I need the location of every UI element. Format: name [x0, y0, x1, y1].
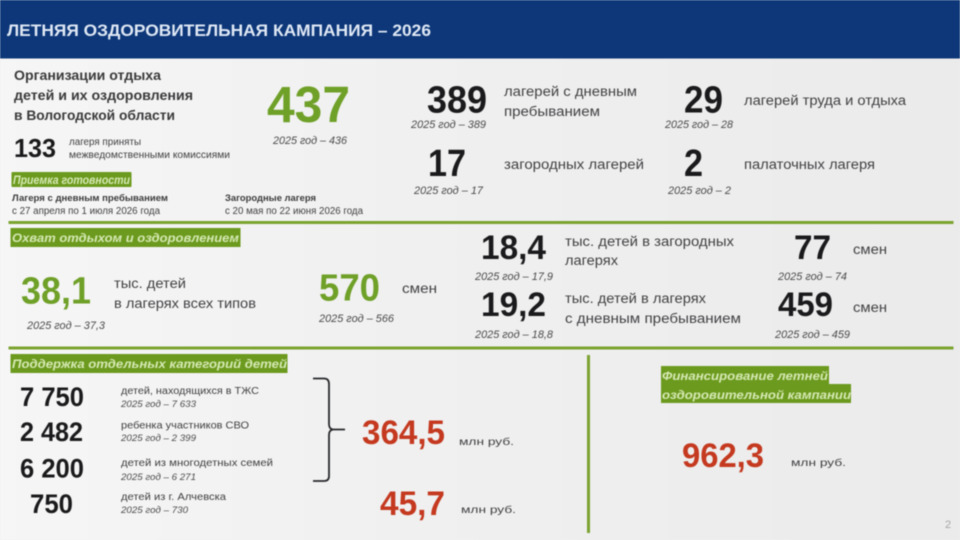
- stat: 19,2: 19,2: [481, 286, 546, 324]
- stat: 389: лагерей с дневным: [504, 84, 637, 99]
- stat: 2: палаточных лагеря: [744, 157, 875, 172]
- stat: 38,1: 38,1: [21, 270, 91, 312]
- stat: 389: 389: [427, 80, 487, 122]
- stat: 18,4: лагерях: [565, 253, 618, 268]
- stat: 2 482: 2025 год – 2 399: [120, 433, 197, 444]
- amount: 962,3: [682, 437, 846, 475]
- stat: 17: 17: [428, 143, 466, 185]
- dates: country camps: с 20 мая по 22 июня 2026 года: [225, 206, 363, 217]
- stat: 18,4: 2025 год – 17,9: [474, 271, 553, 283]
- stat: 17: [413, 143, 644, 197]
- stat: 389: [410, 80, 637, 131]
- stat: 570: 570: [319, 268, 380, 310]
- amount: 45,7: млн руб.: [461, 504, 516, 516]
- stat: 750: [30, 489, 226, 519]
- stat: 459: смен: [853, 300, 887, 315]
- stat: 6 200: [20, 454, 273, 484]
- stat: 7 750: 2025 год – 7 633: [120, 399, 197, 410]
- panel: organisations: [12, 67, 907, 217]
- stat: 6 200: 6 200: [20, 454, 84, 484]
- stat: 750: детей из г. Алчевска: [121, 492, 226, 503]
- stat: 18,4: 18,4: [481, 229, 546, 267]
- amount: 364,5: 364,5: [362, 414, 445, 452]
- label: financing: [661, 366, 852, 403]
- stat: 29: [664, 80, 907, 131]
- stat: 17: загородных лагерей: [504, 157, 644, 172]
- amount: 364,5: [362, 414, 514, 452]
- stat: 2: 2025 год – 2: [667, 185, 731, 197]
- amount: 962,3: млн руб.: [791, 457, 846, 469]
- stat: 133: [14, 133, 230, 163]
- stat: 6 200: 2025 год – 6 271: [120, 472, 196, 483]
- stat: 750: 2025 год – 730: [120, 505, 189, 516]
- stat: 38,1: в лагерях всех типов: [114, 296, 256, 311]
- stat: 389: пребыванием: [504, 104, 600, 119]
- panel: coverage: [10, 228, 887, 341]
- stat: 38,1: [21, 270, 256, 332]
- stat: 77: [777, 229, 887, 283]
- stat: 77: 2025 год – 74: [777, 271, 847, 283]
- stat: 459: 2025 год – 459: [774, 329, 850, 341]
- stat: 77: смен: [853, 242, 887, 257]
- label: coverage: [10, 228, 240, 247]
- stat: 19,2: [474, 286, 741, 341]
- dates: day camps: [12, 193, 168, 217]
- heading: organisations: в Вологодской области: [14, 107, 175, 123]
- stat: 133: лагеря приняты: [69, 137, 141, 148]
- stat: 7 750: 7 750: [20, 382, 84, 412]
- stat: 38,1: 2025 год – 37,3: [26, 320, 106, 332]
- stat: 437: 2025 год – 436: [272, 135, 348, 147]
- stat: 2 482: [20, 417, 249, 447]
- bracket: [313, 378, 345, 481]
- label: readiness: Приемка готовности: [13, 173, 131, 187]
- stat: 2: 2: [684, 143, 703, 185]
- stat: 437: 437: [267, 76, 350, 133]
- stat: 459: 459: [778, 286, 833, 324]
- title: ЛЕТНЯЯ ОЗДОРОВИТЕЛЬНАЯ КАМПАНИЯ – 2026: [7, 21, 431, 40]
- stat: 18,4: [474, 229, 734, 283]
- stat: 7 750: [20, 382, 259, 412]
- heading: organisations: детей и их оздоровления: [14, 87, 193, 103]
- stat: 570: 2025 год – 566: [318, 313, 395, 325]
- stat: 133: 133: [14, 133, 56, 163]
- stat: 570: [318, 268, 437, 325]
- stat: 38,1: тыс. детей: [114, 276, 186, 291]
- page number: 2: [945, 519, 951, 531]
- stat: 19,2: тыс. детей в лагерях: [565, 291, 706, 306]
- dates: country camps: Загородные лагеря: [225, 193, 316, 204]
- label: financing: Финансирование летней: [662, 369, 829, 383]
- stat: 19,2: 2025 год – 18,8: [474, 329, 554, 341]
- stat: 29: 2025 год – 28: [664, 119, 734, 131]
- dates: day camps: Лагеря с дневным пребыванием: [12, 193, 168, 204]
- label: support: [10, 354, 288, 373]
- amount: 45,7: [380, 485, 516, 523]
- heading: organisations: Организации отдыха: [14, 67, 161, 83]
- stat: 29: лагерей труда и отдыха: [744, 93, 907, 108]
- stat: 389: 2025 год – 389: [410, 119, 486, 131]
- stat: 29: 29: [684, 80, 723, 122]
- stat: 7 750: детей, находящихся в ТЖС: [121, 386, 259, 397]
- stat: 19,2: с дневным пребыванием: [565, 311, 741, 326]
- stat: 17: 2025 год – 17: [413, 185, 484, 197]
- stat: 2: [667, 143, 875, 197]
- stat: 2 482: 2 482: [20, 417, 83, 447]
- heading: organisations: [14, 67, 193, 123]
- panel: financing: [661, 366, 852, 475]
- label: coverage: Охват отдыхом и оздоровлением: [12, 231, 239, 245]
- stat: 2 482: ребенка участников СВО: [121, 420, 249, 432]
- amount: 962,3: 962,3: [682, 437, 764, 475]
- stat: 18,4: тыс. детей в загородных: [565, 234, 734, 249]
- stat: 77: 77: [794, 229, 831, 267]
- label: financing: оздоровительной кампании: [662, 388, 852, 402]
- stat: 459: [774, 286, 887, 341]
- panel: support categories: [10, 354, 516, 523]
- stat: 6 200: детей из многодетных семей: [121, 458, 273, 469]
- dates: country camps: [225, 193, 363, 217]
- dates: day camps: с 27 апреля по 1 июля 2026 года: [12, 206, 160, 217]
- stat: 750: 750: [30, 489, 73, 519]
- header band: [0, 0, 960, 58]
- amount: 45,7: 45,7: [380, 485, 445, 523]
- stat: 570: смен: [402, 281, 437, 296]
- stat: 133: межведомственными комиссиями: [69, 150, 230, 161]
- amount: 364,5: млн руб.: [459, 436, 514, 448]
- label: support: Поддержка отдельных категорий детей: [12, 357, 288, 371]
